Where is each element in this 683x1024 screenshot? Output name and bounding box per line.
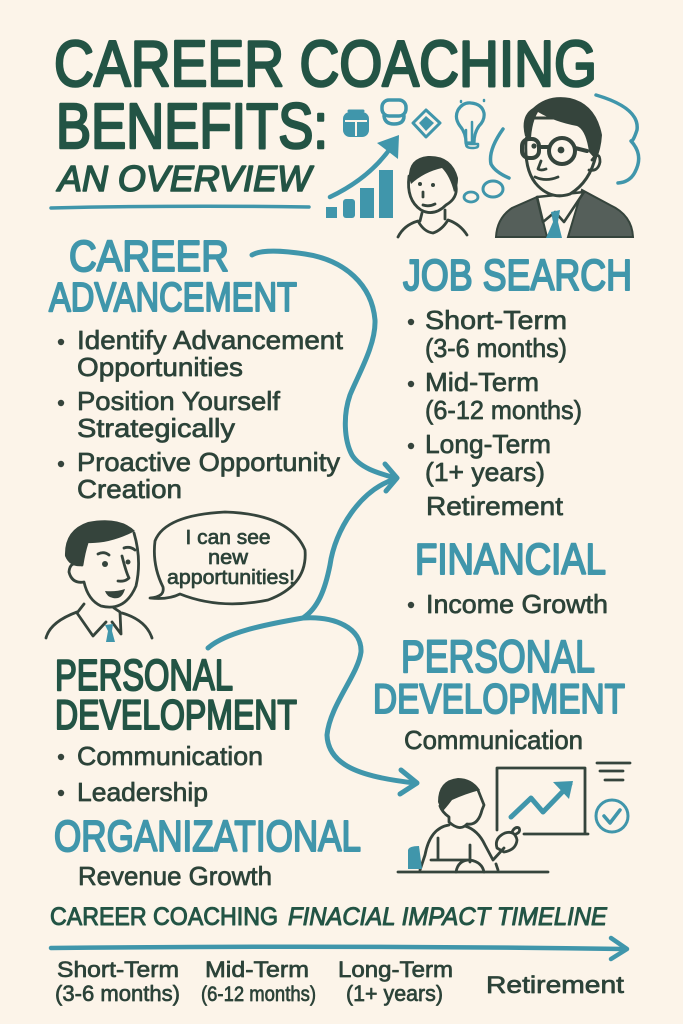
section: personal development right bbox=[373, 631, 625, 755]
section: personal development left bbox=[55, 651, 297, 807]
text: Revenue Growth bbox=[78, 861, 272, 891]
speech curve: left bbox=[490, 129, 509, 178]
arrow: merge into job search bbox=[208, 479, 395, 648]
icon: jar bbox=[382, 100, 406, 124]
heading: FINANCIAL bbox=[415, 535, 606, 584]
subtitle underline bbox=[51, 206, 309, 208]
speech bubble: apportunities! bbox=[167, 567, 295, 589]
illustration: small person bbox=[398, 156, 467, 237]
speech bubble: I can see bbox=[186, 527, 270, 549]
heading: DEVELOPMENT bbox=[55, 691, 297, 738]
icon: growth bar chart with arrow bbox=[326, 135, 399, 218]
speech bubble bbox=[150, 512, 305, 604]
thought bubbles bbox=[464, 181, 503, 202]
heading: JOB SEARCH bbox=[403, 251, 632, 300]
title: CAREER COACHING bbox=[54, 27, 597, 100]
section: financial bbox=[408, 535, 608, 619]
bullet list: Strategically bbox=[77, 413, 235, 443]
section: organizational bbox=[54, 812, 361, 891]
bullet list: Identify Advancement bbox=[77, 325, 344, 355]
illustration: man speaking bbox=[46, 520, 152, 642]
timeframe list: (1+ years) bbox=[425, 457, 545, 487]
timeframe list: Mid-Term bbox=[425, 367, 539, 397]
bullet list bbox=[58, 741, 263, 807]
section: career advancement bbox=[49, 232, 344, 504]
timeline labels: Retirement bbox=[486, 972, 624, 999]
timeline title: CAREER COACHING bbox=[50, 903, 278, 931]
timeline labels bbox=[55, 957, 624, 1006]
subtitle: AN OVERVIEW bbox=[56, 158, 314, 199]
timeframe list: Short-Term bbox=[425, 305, 567, 335]
timeframe list: (3-6 months) bbox=[425, 333, 567, 363]
bullet list: Opportunities bbox=[77, 352, 243, 382]
timeline arrow bbox=[51, 938, 627, 959]
timeframe list bbox=[408, 305, 582, 521]
tie bbox=[546, 210, 562, 238]
heading: PERSONAL bbox=[55, 651, 233, 700]
timeframe list: Long-Term bbox=[425, 429, 551, 459]
heading: DEVELOPMENT bbox=[373, 675, 625, 722]
timeframe list: Retirement bbox=[426, 491, 564, 521]
timeline labels: (6-12 months) bbox=[201, 983, 316, 1006]
title: BENEFITS: bbox=[56, 90, 328, 162]
arrow: career advancement to job search bbox=[252, 251, 397, 491]
title bbox=[54, 27, 597, 162]
bullet list: Communication bbox=[77, 741, 263, 771]
timeline title bbox=[50, 903, 607, 931]
icon: light bulb bbox=[456, 100, 484, 148]
speech bubble: new bbox=[208, 547, 249, 569]
bullet list bbox=[58, 325, 344, 504]
bullet list: Position Yourself bbox=[77, 386, 281, 416]
section: job search bbox=[403, 251, 632, 521]
icon: check circle bbox=[596, 800, 628, 832]
heading: ORGANIZATIONAL bbox=[54, 812, 361, 861]
heading: PERSONAL bbox=[401, 631, 595, 682]
timeframe list: (6-12 months) bbox=[425, 395, 582, 425]
icon: diamond bbox=[413, 110, 440, 137]
speech curve: right bbox=[596, 95, 639, 183]
timeline labels: (3-6 months) bbox=[55, 981, 180, 1006]
heading bbox=[49, 232, 297, 320]
illustration: coach with glasses bbox=[496, 97, 633, 238]
timeline labels: Short-Term bbox=[57, 957, 179, 982]
list item: Income Growth bbox=[426, 589, 608, 619]
timeline title: FINACIAL IMPACT TIMELINE bbox=[288, 903, 607, 931]
heading bbox=[373, 631, 625, 722]
timeline labels: Long-Term bbox=[338, 957, 453, 982]
icon: text lines bbox=[597, 763, 630, 780]
icon: briefcase bbox=[343, 111, 369, 137]
heading: CAREER bbox=[69, 232, 229, 281]
heading: ADVANCEMENT bbox=[49, 274, 297, 320]
face bbox=[526, 118, 596, 196]
text: Communication bbox=[404, 725, 583, 755]
bullet list: Leadership bbox=[77, 777, 208, 807]
heading bbox=[55, 651, 297, 738]
bullet list: Creation bbox=[77, 474, 182, 504]
timeline labels: Mid-Term bbox=[205, 957, 309, 982]
jacket bbox=[496, 190, 633, 237]
arrow: to personal development illustration bbox=[303, 618, 417, 794]
bullet list: Proactive Opportunity bbox=[77, 447, 340, 477]
timeline labels: (1+ years) bbox=[346, 981, 443, 1006]
illustration: person presenting chart bbox=[398, 768, 588, 872]
